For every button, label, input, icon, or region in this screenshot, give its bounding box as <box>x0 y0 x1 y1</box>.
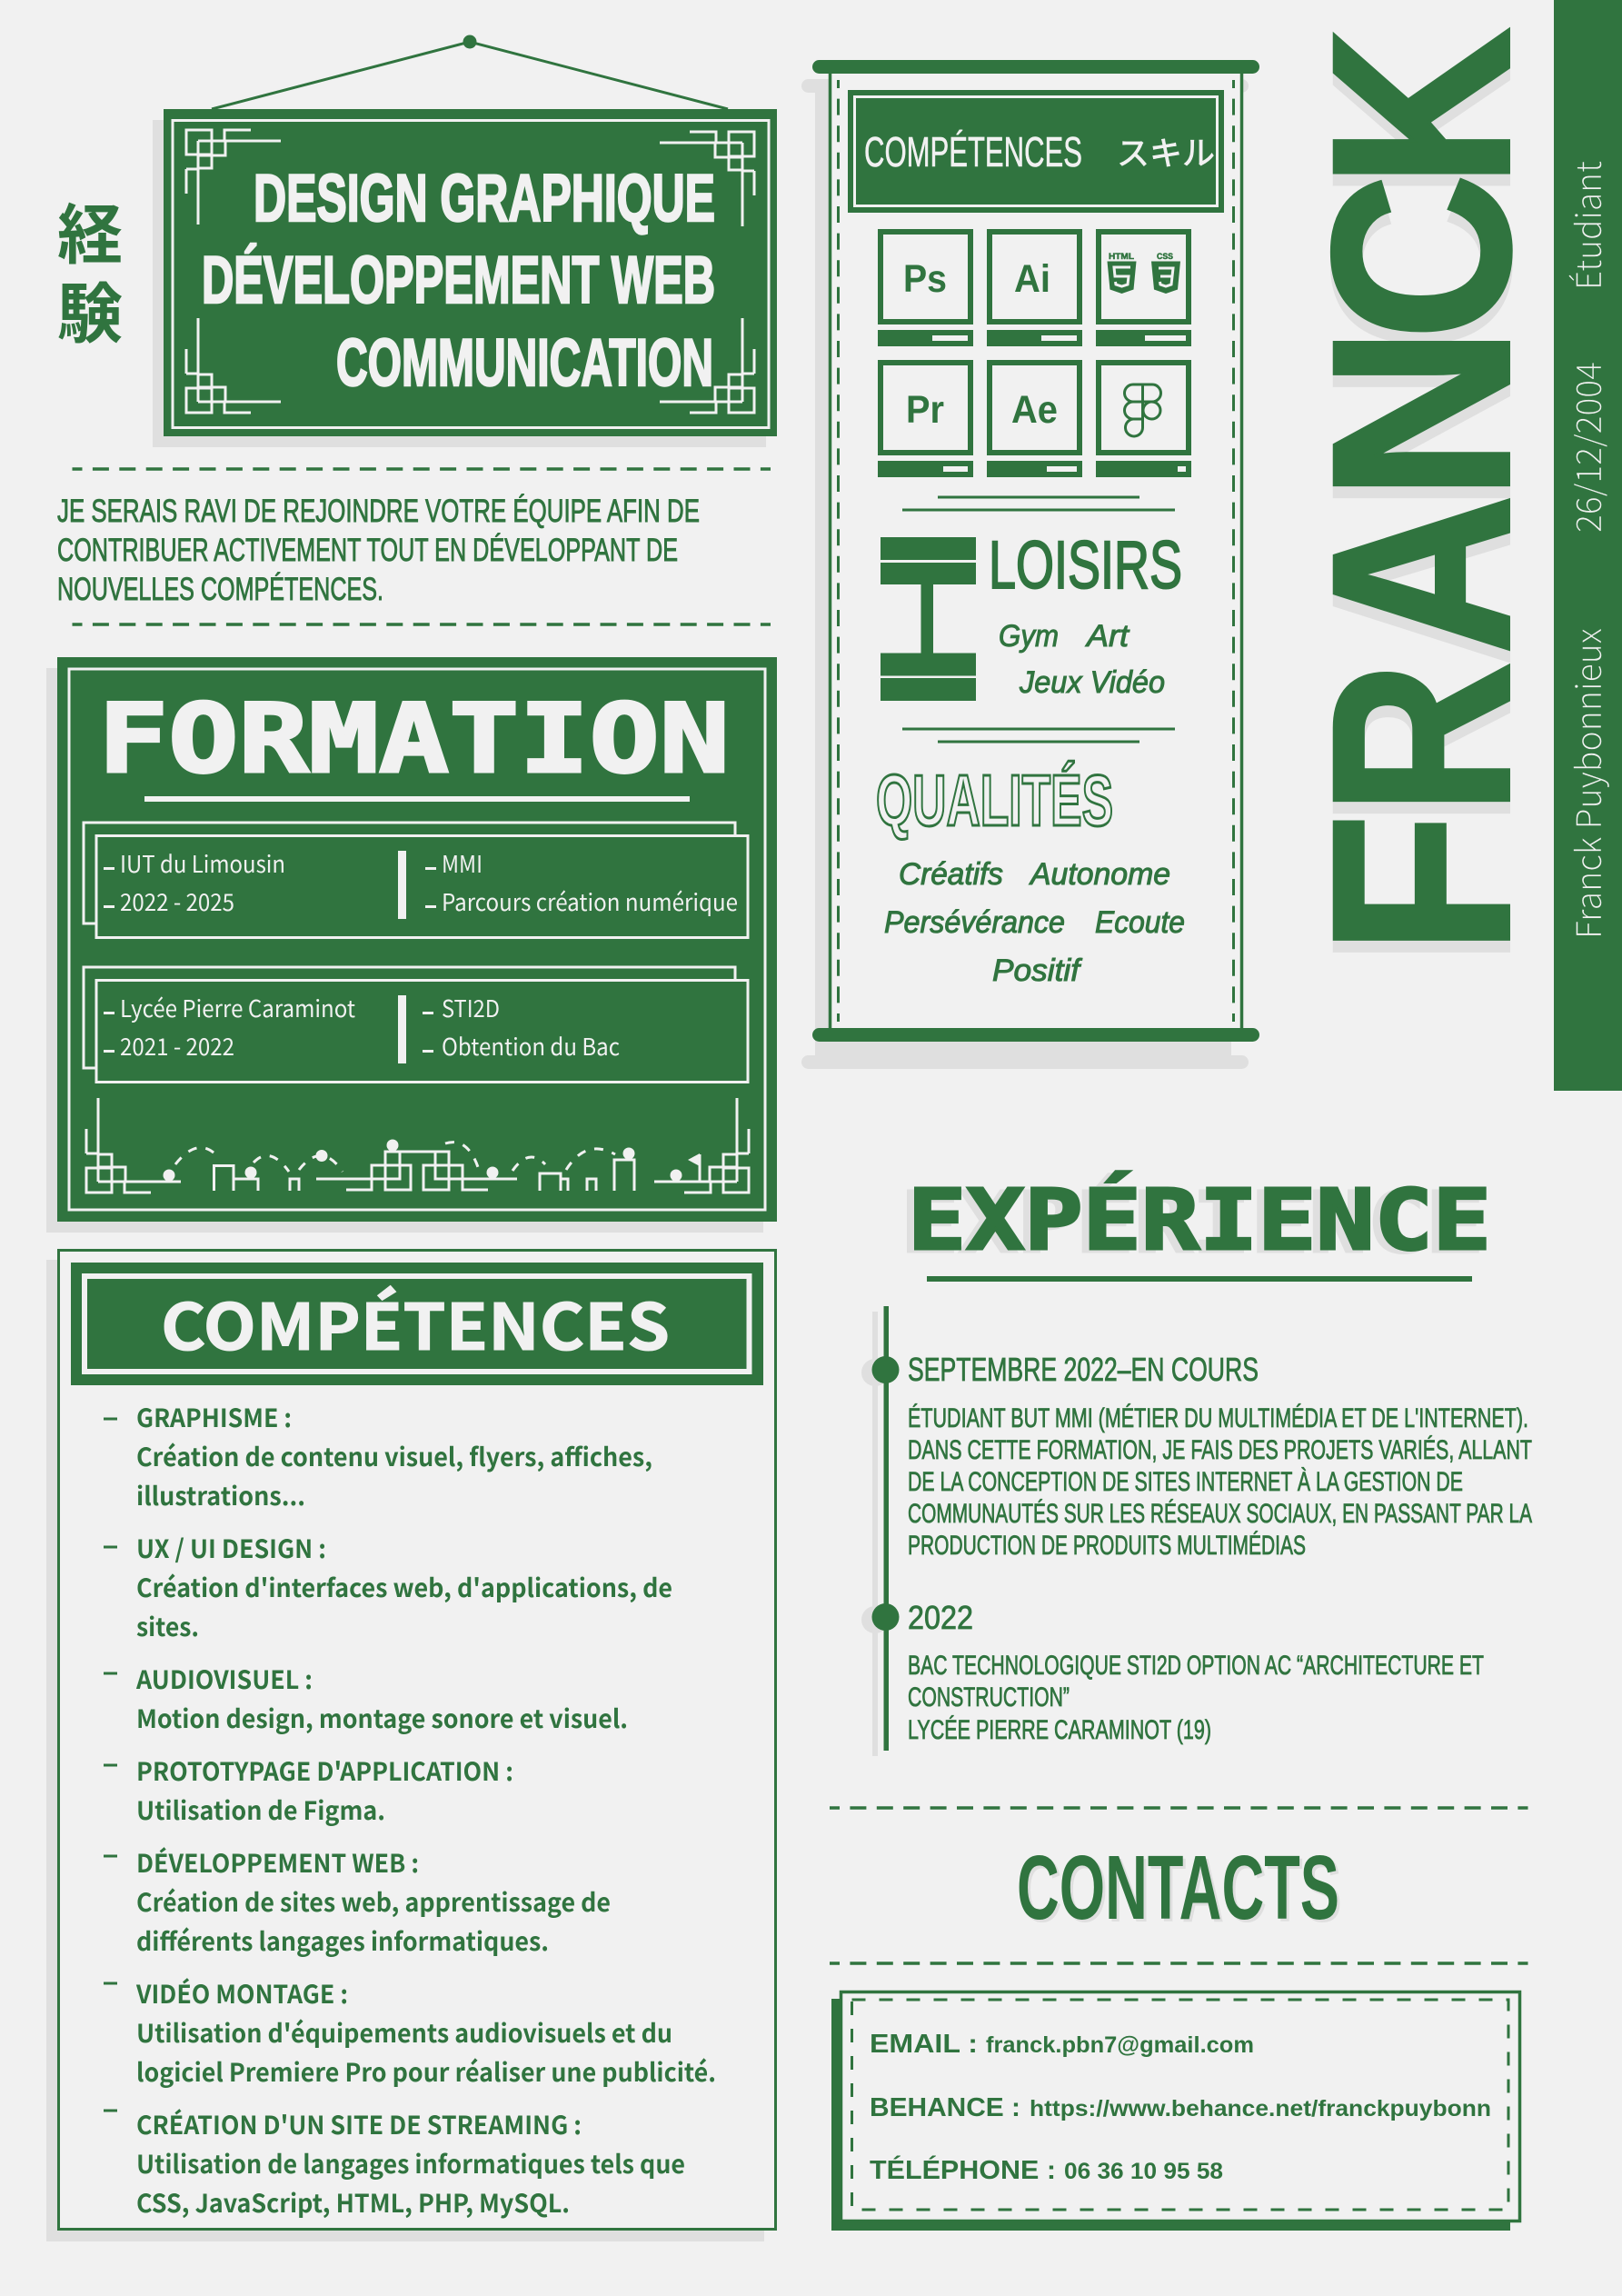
icon: html and css shields: CSS <box>1157 252 1173 261</box>
text block: qualities <box>884 857 1185 988</box>
scroll heading: competences skill: COMPÉTENCES <box>864 128 1082 175</box>
list: skills: GRAPHISME : <box>136 1399 292 1435</box>
list: skills: DÉVELOPPEMENT WEB : <box>136 1844 419 1881</box>
entry: septembre 2022 <box>908 1351 1532 1561</box>
list: skills: sites. <box>136 1608 199 1644</box>
contact: telephone: 06 36 10 95 58 <box>1064 2159 1223 2184</box>
heading: qualites: QUALITÉS <box>876 760 1113 841</box>
entry: 2022: CONSTRUCTION” <box>908 1682 1070 1712</box>
card: Lycée Pierre Caraminot <box>84 967 748 1082</box>
title: FRANCK vertical: F <box>1279 814 1562 954</box>
list: skills: Utilisation de langages informatiques tels que <box>136 2145 685 2181</box>
heading: contacts <box>1017 1837 1342 1942</box>
text block: hobbies: Jeux Vidéo <box>1019 665 1165 700</box>
title: FRANCK vertical: K <box>1279 28 1562 187</box>
heading: experience: EXPÉRIENCE <box>908 1171 1491 1269</box>
icon: figma <box>1125 384 1161 436</box>
entry: septembre 2022: PRODUCTION DE PRODUITS MULTIMÉDIAS <box>908 1531 1306 1561</box>
heading: kanji experience: 験 <box>57 261 123 356</box>
heading: competences <box>71 1263 763 1385</box>
scroll heading: competences skill <box>848 90 1224 213</box>
sign heading: fields: COMMUNICATION <box>336 326 713 400</box>
entry: 2022: LYCÉE PIERRE CARAMINOT (19) <box>908 1715 1211 1745</box>
icon: dumbbell <box>881 537 976 701</box>
entry: septembre 2022: SEPTEMBRE 2022–EN COURS <box>908 1351 1259 1388</box>
divider: dashed contacts bottom <box>830 1962 1528 1965</box>
divider: dashed contacts top <box>830 1806 1528 1810</box>
sign heading: fields: DÉVELOPPEMENT WEB <box>202 244 715 317</box>
list: skills: Création de contenu visuel, flyers, affiches, <box>136 1438 652 1474</box>
card: Lycée Pierre Caraminot: Obtention du Bac <box>442 1029 620 1063</box>
title: FRANCK vertical: N <box>1279 326 1562 501</box>
title: FRANCK vertical: C <box>1279 174 1562 340</box>
title: FRANCK vertical: F <box>1279 825 1562 966</box>
panel: identity sidebar: 26/12/2004 <box>1561 362 1611 533</box>
divider: dashed top <box>73 467 771 471</box>
text block: hobbies: Art <box>1085 619 1130 654</box>
panel: formation <box>46 657 777 1233</box>
text block: hobbies <box>999 619 1165 700</box>
panel: identity sidebar <box>1554 0 1622 1091</box>
list: skills <box>104 1399 716 2221</box>
heading: kanji experience <box>57 182 123 356</box>
list: skills: Motion design, montage sonore et visuel. <box>136 1700 628 1736</box>
heading: formation: FORMATION <box>98 684 730 794</box>
card: Lycée Pierre Caraminot: 2021 - 2022 <box>120 1029 234 1063</box>
icon grid: software: Pr <box>906 388 944 432</box>
text block: hobbies: Gym <box>999 619 1059 654</box>
contact: email: franck.pbn7@gmail.com <box>986 2032 1254 2058</box>
list: skills: logiciel Premiere Pro pour réaliser une publicité. <box>136 2053 716 2090</box>
sign heading: fields <box>202 162 715 400</box>
divider: scroll rules <box>902 497 1175 742</box>
heading: contacts: CONTACTS <box>1017 1837 1339 1939</box>
contact: behance <box>870 2093 1491 2122</box>
heading: competences: COMPÉTENCES <box>161 1277 670 1369</box>
card: IUT du Limousin <box>84 823 748 938</box>
contact: behance: BEHANCE : <box>870 2093 1020 2122</box>
panel: identity sidebar: Franck Puybonnieux <box>1561 628 1611 939</box>
scroll heading: competences skill: スキル <box>1117 127 1215 175</box>
title: FRANCK vertical: R <box>1279 662 1562 814</box>
contact: email: EMAIL : <box>870 2030 978 2059</box>
heading: contacts: CONTACTS <box>1020 1840 1342 1942</box>
icon grid: software: Ps <box>903 257 947 301</box>
card: IUT du Limousin: Parcours création numérique <box>442 884 738 918</box>
text block: introduction: CONTRIBUER ACTIVEMENT TOUT EN DÉVELOPPANT DE <box>57 533 678 568</box>
list: skills: Utilisation d'équipements audiovisuels et du <box>136 2014 672 2051</box>
divider: dashed second <box>73 623 771 626</box>
title: FRANCK vertical: N <box>1279 338 1562 513</box>
title: FRANCK vertical: R <box>1279 674 1562 826</box>
text block: qualities: Positif <box>992 953 1083 988</box>
title: FRANCK vertical: C <box>1279 185 1562 352</box>
list: skills: VIDÉO MONTAGE : <box>135 1975 348 2011</box>
sign heading: fields: DESIGN GRAPHIQUE <box>254 162 715 235</box>
illustration: platform game frieze <box>86 1098 749 1193</box>
text block: qualities: Autonome <box>1029 857 1170 892</box>
card: IUT du Limousin: IUT du Limousin <box>120 846 285 880</box>
text block: qualities: Persévérance <box>884 905 1065 940</box>
list: skills: UX / UI DESIGN : <box>136 1530 326 1566</box>
list: skills: CSS, JavaScript, HTML, PHP, MySQL. <box>136 2184 570 2221</box>
card: IUT du Limousin: 2022 - 2025 <box>120 884 234 918</box>
list: skills: Création de sites web, apprentissage de <box>136 1883 611 1920</box>
contact: telephone: TÉLÉPHONE : <box>870 2154 1056 2185</box>
panel: competences <box>46 1251 776 2241</box>
title: FRANCK vertical <box>1279 28 1562 966</box>
text block: introduction: NOUVELLES COMPÉTENCES. <box>57 572 383 607</box>
icon grid: software <box>878 232 1191 477</box>
contact: telephone <box>870 2154 1223 2185</box>
list: skills: CRÉATION D'UN SITE DE STREAMING : <box>136 2106 582 2142</box>
card: IUT du Limousin: MMI <box>442 846 483 880</box>
panel: hanging scroll <box>801 60 1259 1069</box>
list: skills: différents langages informatiques. <box>136 1922 549 1959</box>
title: FRANCK vertical: A <box>1279 494 1562 654</box>
entry: 2022 <box>908 1599 1484 1745</box>
contact: behance: https://www.behance.net/franckpuybonn <box>1030 2096 1491 2121</box>
list: skills: Création d'interfaces web, d'applications, de <box>136 1569 672 1605</box>
heading: kanji experience: 経 <box>57 182 123 277</box>
entry: 2022: 2022 <box>908 1599 973 1636</box>
list: skills: Utilisation de Figma. <box>136 1792 385 1828</box>
panel: contact details <box>831 1992 1519 2231</box>
list: skills: illustrations... <box>136 1477 305 1513</box>
card: Lycée Pierre Caraminot: Lycée Pierre Caraminot <box>120 991 355 1024</box>
icon grid: software: Ae <box>1011 388 1058 432</box>
icon: html and css shields <box>1107 252 1180 294</box>
heading: loisirs: LOISIRS <box>989 527 1182 603</box>
text block: introduction: JE SERAIS RAVI DE REJOINDRE VOTRE ÉQUIPE AFIN DE <box>57 494 700 529</box>
heading: experience: EXPÉRIENCE <box>901 1173 1484 1272</box>
title: FRANCK vertical: A <box>1279 506 1562 666</box>
icon: html and css shields: HTML <box>1109 252 1135 261</box>
title: FRANCK vertical: K <box>1279 40 1562 199</box>
icon grid: software: Ai <box>1014 257 1050 301</box>
text block: qualities: Créatifs <box>899 857 1003 892</box>
list: skills: AUDIOVISUEL : <box>135 1661 313 1697</box>
panel: hanging sign <box>153 35 777 447</box>
text block: qualities: Ecoute <box>1095 905 1185 940</box>
panel: identity sidebar: Étudiant <box>1561 161 1611 290</box>
contact: email <box>870 2030 1254 2059</box>
card: Lycée Pierre Caraminot: STI2D <box>442 991 500 1024</box>
text block: introduction <box>57 494 700 607</box>
timeline: experience <box>861 1306 1532 1756</box>
list: skills: PROTOTYPAGE D'APPLICATION : <box>136 1752 513 1789</box>
